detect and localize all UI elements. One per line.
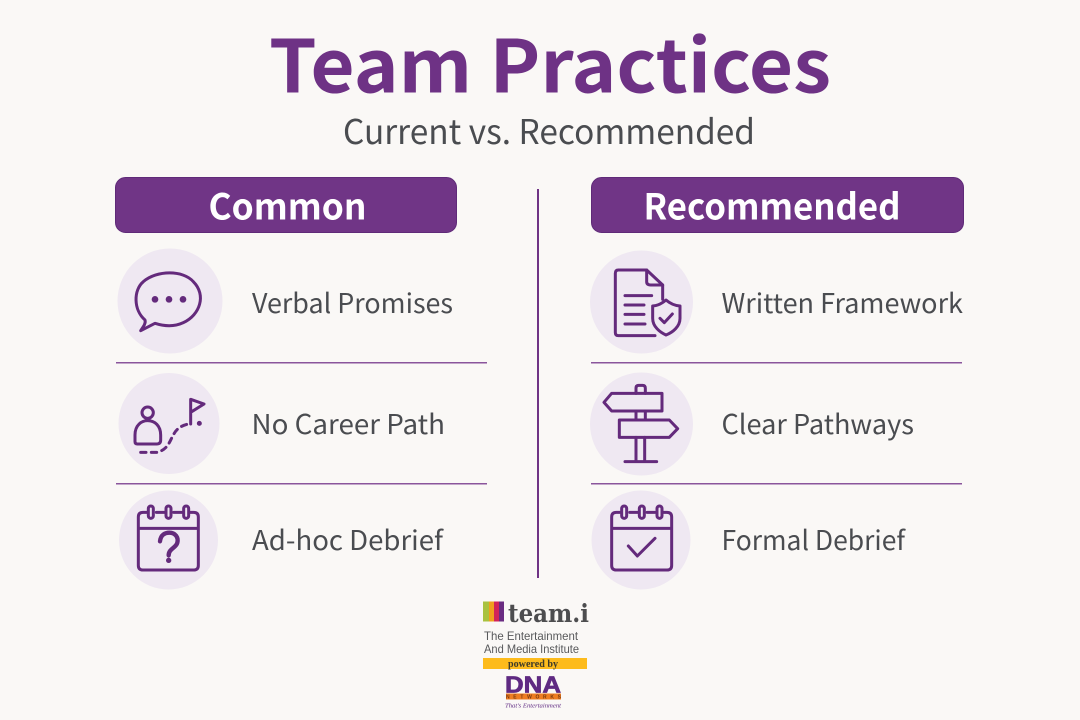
text: clear pathways: Clear Pathways (722, 403, 914, 442)
text: verbal promises: Verbal Promises (252, 282, 453, 321)
icon: speech bubble (118, 248, 222, 354)
text: formal debrief: Formal Debrief (722, 519, 906, 558)
subtitle: Current vs. Recommended (343, 105, 755, 154)
text: no career path: No Career Path (252, 403, 445, 442)
text: written framework: Written Framework (722, 282, 963, 321)
logo mark: colour stripes (483, 602, 504, 622)
icon: calendar with question mark (119, 490, 218, 590)
icon: person and career path with flag (118, 373, 220, 474)
panel: common header: Common (208, 178, 366, 230)
logo: team.i powered by DNA: DNA (505, 672, 561, 698)
panel: recommended header (592, 178, 964, 232)
icon: calendar with check mark (592, 490, 690, 590)
logo: team.i powered by DNA: NETWORKS (506, 694, 562, 700)
logo: team.i powered by DNA: The Entertainment (484, 629, 579, 643)
title: Team Practices (269, 8, 831, 114)
icon: signpost (590, 372, 693, 476)
panel: recommended header: Recommended (644, 178, 900, 230)
icon: document with shield (590, 250, 693, 354)
text: ad-hoc debrief: Ad-hoc Debrief (252, 519, 444, 558)
logo: team.i powered by DNA: That's Entertainment (505, 702, 561, 710)
panel: common header (116, 178, 456, 232)
logo: team.i powered by DNA: powered by (508, 659, 559, 670)
logo: team.i powered by DNA: And Media Institute (484, 642, 579, 656)
logo: team.i powered by DNA: team.i (508, 599, 589, 628)
logo: team.i powered by DNA (483, 599, 589, 710)
